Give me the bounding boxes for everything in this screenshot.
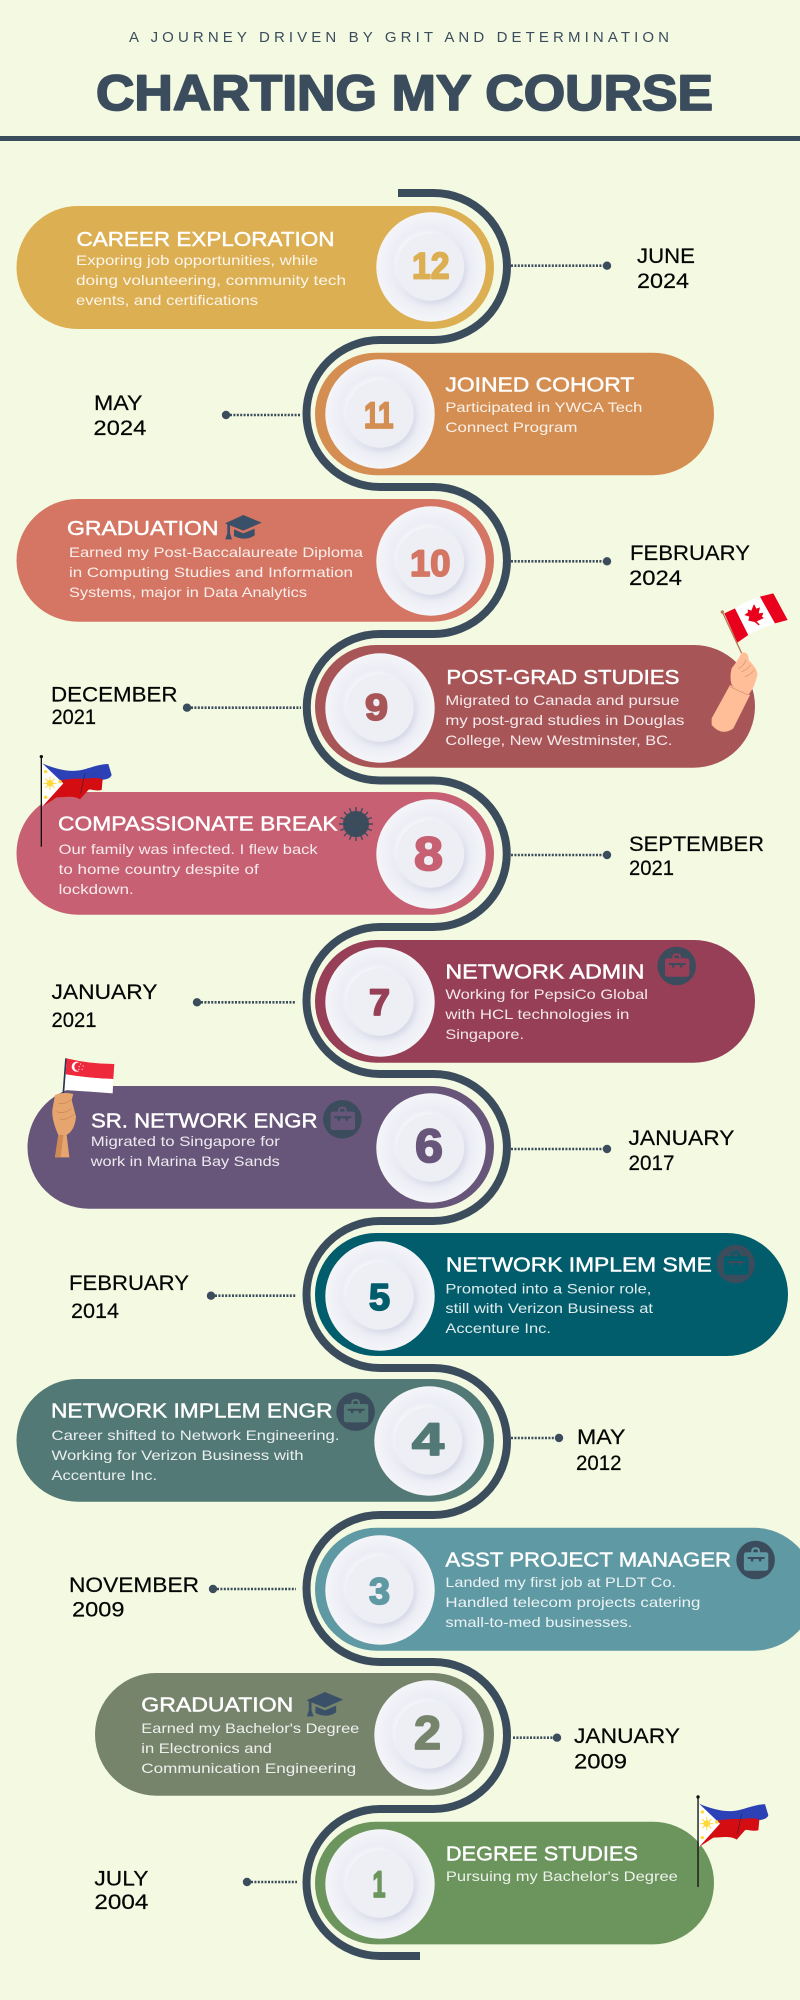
heading: GRADUATION (141, 1695, 293, 1717)
step 4: network implementation engineer (16, 1379, 626, 1502)
heading: SR. NETWORK ENGR (91, 1111, 318, 1133)
number disk: 1 (372, 1864, 386, 1905)
number disk: 10 (410, 543, 450, 584)
date: JANUARY (52, 981, 158, 1004)
description: still with Verizon Business at (445, 1300, 653, 1316)
date (628, 1127, 734, 1175)
date (69, 1272, 189, 1323)
heading: NETWORK IMPLEM ENGR (51, 1401, 333, 1423)
panel (315, 1822, 714, 1944)
date (576, 1426, 626, 1475)
step 2: graduation bachelor (95, 1673, 680, 1796)
connector (209, 1585, 296, 1593)
icon: briefcase (716, 1245, 755, 1283)
date: SEPTEMBER (629, 833, 764, 856)
date (637, 245, 695, 293)
description (76, 252, 346, 308)
description: events, and certifications (76, 292, 258, 308)
description (445, 1574, 700, 1630)
description: Migrated to Singapore for (91, 1133, 280, 1149)
heading: GRADUATION (67, 518, 218, 540)
description: Accenture Inc. (445, 1320, 551, 1336)
step 10: graduation diploma (16, 499, 750, 622)
date: MAY (94, 392, 142, 415)
connector (207, 1292, 296, 1300)
description (52, 1427, 340, 1483)
description: Earned my Post-Baccalaureate Diploma (69, 544, 363, 560)
heading: POST-GRAD STUDIES (446, 667, 679, 689)
date (69, 1574, 199, 1622)
description: Participated in YWCA Tech (445, 399, 642, 415)
icon: briefcase (657, 947, 696, 985)
date (52, 981, 158, 1032)
icon: hand with singapore flag (52, 1058, 114, 1157)
date: 2012 (576, 1452, 622, 1475)
panel (16, 1379, 494, 1502)
panel (315, 645, 755, 768)
number disk: 5 (369, 1277, 390, 1318)
step 6: senior network engineer (28, 1058, 734, 1209)
date: 2024 (629, 567, 682, 590)
panel (315, 940, 755, 1063)
number disk (325, 1829, 435, 1939)
step 7: network admin (52, 940, 755, 1063)
description (445, 399, 642, 435)
number disk: 8 (414, 827, 443, 880)
description: in Computing Studies and Information (69, 564, 353, 580)
description: Communication Engineering (141, 1760, 356, 1776)
number disk: 11 (364, 395, 394, 436)
description: small-to-med businesses. (445, 1614, 632, 1630)
description: to home country despite of (59, 861, 259, 877)
description: Connect Program (445, 419, 577, 435)
description: Our family was infected. I flew back (59, 841, 319, 857)
description: Accenture Inc. (52, 1467, 157, 1483)
icon: graduation cap (225, 515, 262, 539)
description: lockdown. (59, 881, 134, 897)
number disk (376, 1093, 486, 1203)
step 9: post-grad studies (51, 593, 788, 768)
description: Earned my Bachelor's Degree (141, 1720, 360, 1736)
description: Singapore. (445, 1026, 524, 1042)
panel (315, 1233, 788, 1356)
date (51, 684, 178, 729)
heading: COMPASSIONATE BREAK (58, 814, 338, 836)
number disk (325, 359, 435, 469)
date: 2017 (628, 1152, 674, 1175)
panel (16, 792, 494, 915)
step 5: network implementation sme (69, 1233, 788, 1356)
number disk: 3 (369, 1571, 390, 1612)
description: my post-grad studies in Douglas (445, 712, 684, 728)
description: Career shifted to Network Engineering. (52, 1427, 340, 1443)
description (59, 841, 319, 897)
number disk: 7 (369, 982, 390, 1023)
connector (511, 262, 611, 270)
connector (511, 851, 611, 859)
date: 2024 (93, 417, 147, 440)
heading: NETWORK IMPLEM SME (446, 1255, 712, 1277)
connector (511, 1145, 611, 1153)
heading: NETWORK ADMIN (445, 961, 644, 983)
number disk (325, 947, 435, 1057)
date (574, 1725, 680, 1774)
date: FEBRUARY (69, 1272, 189, 1295)
heading: ASST PROJECT MANAGER (445, 1550, 731, 1572)
description: in Electronics and (141, 1740, 272, 1756)
number disk: 9 (365, 687, 388, 728)
date: 2014 (71, 1300, 119, 1323)
header rule (0, 136, 800, 141)
connector (511, 1434, 563, 1442)
number disk (325, 1241, 435, 1351)
date: NOVEMBER (69, 1574, 199, 1597)
description: College, New Westminster, BC. (445, 732, 672, 748)
date: 2024 (637, 270, 689, 293)
connector (222, 411, 301, 419)
panel (315, 1528, 800, 1651)
number disk (376, 506, 486, 616)
date (94, 1868, 149, 1914)
date: 2021 (52, 1009, 96, 1032)
date: FEBRUARY (630, 542, 750, 565)
description (445, 1280, 653, 1336)
description: Handled telecom projects catering (445, 1594, 700, 1610)
date: 2021 (52, 706, 96, 729)
description: Working for Verizon Business with (52, 1447, 304, 1463)
date: 2021 (629, 857, 674, 880)
step 8: compassionate break (16, 755, 764, 915)
number disk (374, 1680, 484, 1790)
number disk: 4 (412, 1414, 444, 1465)
date: JULY (94, 1868, 148, 1891)
description: Systems, major in Data Analytics (69, 584, 307, 600)
icon: briefcase (336, 1392, 375, 1431)
connector (193, 998, 296, 1006)
heading: JOINED COHORT (445, 375, 634, 397)
step 3: assistant project manager (69, 1528, 800, 1651)
icon: philippine flag (696, 1795, 768, 1887)
heading: DEGREE STUDIES (446, 1844, 638, 1866)
connector (243, 1878, 297, 1886)
panel (95, 1673, 494, 1796)
description (141, 1720, 360, 1776)
description: Pursuing my Bachelor's Degree (446, 1868, 678, 1884)
connector (513, 1734, 561, 1742)
description: work in Marina Bay Sands (90, 1153, 280, 1169)
icon: philippine flag (40, 755, 112, 847)
icon: graduation cap (306, 1692, 343, 1716)
number disk (376, 799, 486, 909)
connector (183, 704, 301, 712)
description (444, 986, 648, 1042)
date (629, 542, 750, 590)
description: Migrated to Canada and pursue (445, 692, 680, 708)
subtitle: A JOURNEY DRIVEN BY GRIT AND DETERMINATION (129, 29, 669, 46)
date: 2004 (94, 1891, 149, 1914)
date: 2009 (574, 1751, 627, 1774)
connector (511, 557, 611, 566)
number disk (325, 653, 435, 763)
icon: briefcase (736, 1541, 775, 1579)
step 11: joined cohort (93, 353, 714, 475)
description: Working for PepsiCo Global (445, 986, 648, 1002)
date: DECEMBER (51, 684, 178, 707)
step 1: degree studies (94, 1795, 768, 1944)
number disk: 6 (415, 1119, 443, 1172)
panel (16, 499, 494, 622)
date: 2009 (72, 1599, 124, 1622)
description: doing volunteering, community tech (76, 272, 346, 288)
number disk (376, 212, 486, 322)
number disk: 2 (414, 1706, 441, 1759)
panel (16, 206, 494, 329)
step 12: career exploration (16, 206, 695, 329)
panel (315, 353, 714, 475)
description: with HCL technologies in (444, 1006, 629, 1022)
description: Landed my first job at PLDT Co. (445, 1574, 676, 1590)
icon: briefcase (323, 1100, 362, 1139)
title: CHARTING MY COURSE (96, 65, 713, 121)
description (69, 544, 363, 600)
panel (28, 1086, 494, 1209)
date (629, 833, 764, 880)
description (90, 1133, 280, 1169)
icon: virus (339, 807, 373, 841)
icon: hand waving canadian flag (712, 593, 788, 732)
heading: CAREER EXPLORATION (76, 229, 334, 251)
description: Promoted into a Senior role, (445, 1280, 651, 1296)
date: MAY (577, 1426, 626, 1449)
description (445, 692, 684, 748)
serpentine timeline path (306, 193, 507, 1956)
date: JANUARY (628, 1127, 734, 1150)
date (93, 392, 147, 440)
number disk (325, 1535, 435, 1645)
date: JANUARY (574, 1725, 680, 1748)
date: JUNE (637, 245, 695, 268)
number disk: 12 (412, 246, 450, 286)
number disk (374, 1386, 484, 1496)
description: Exporing job opportunities, while (76, 252, 318, 268)
